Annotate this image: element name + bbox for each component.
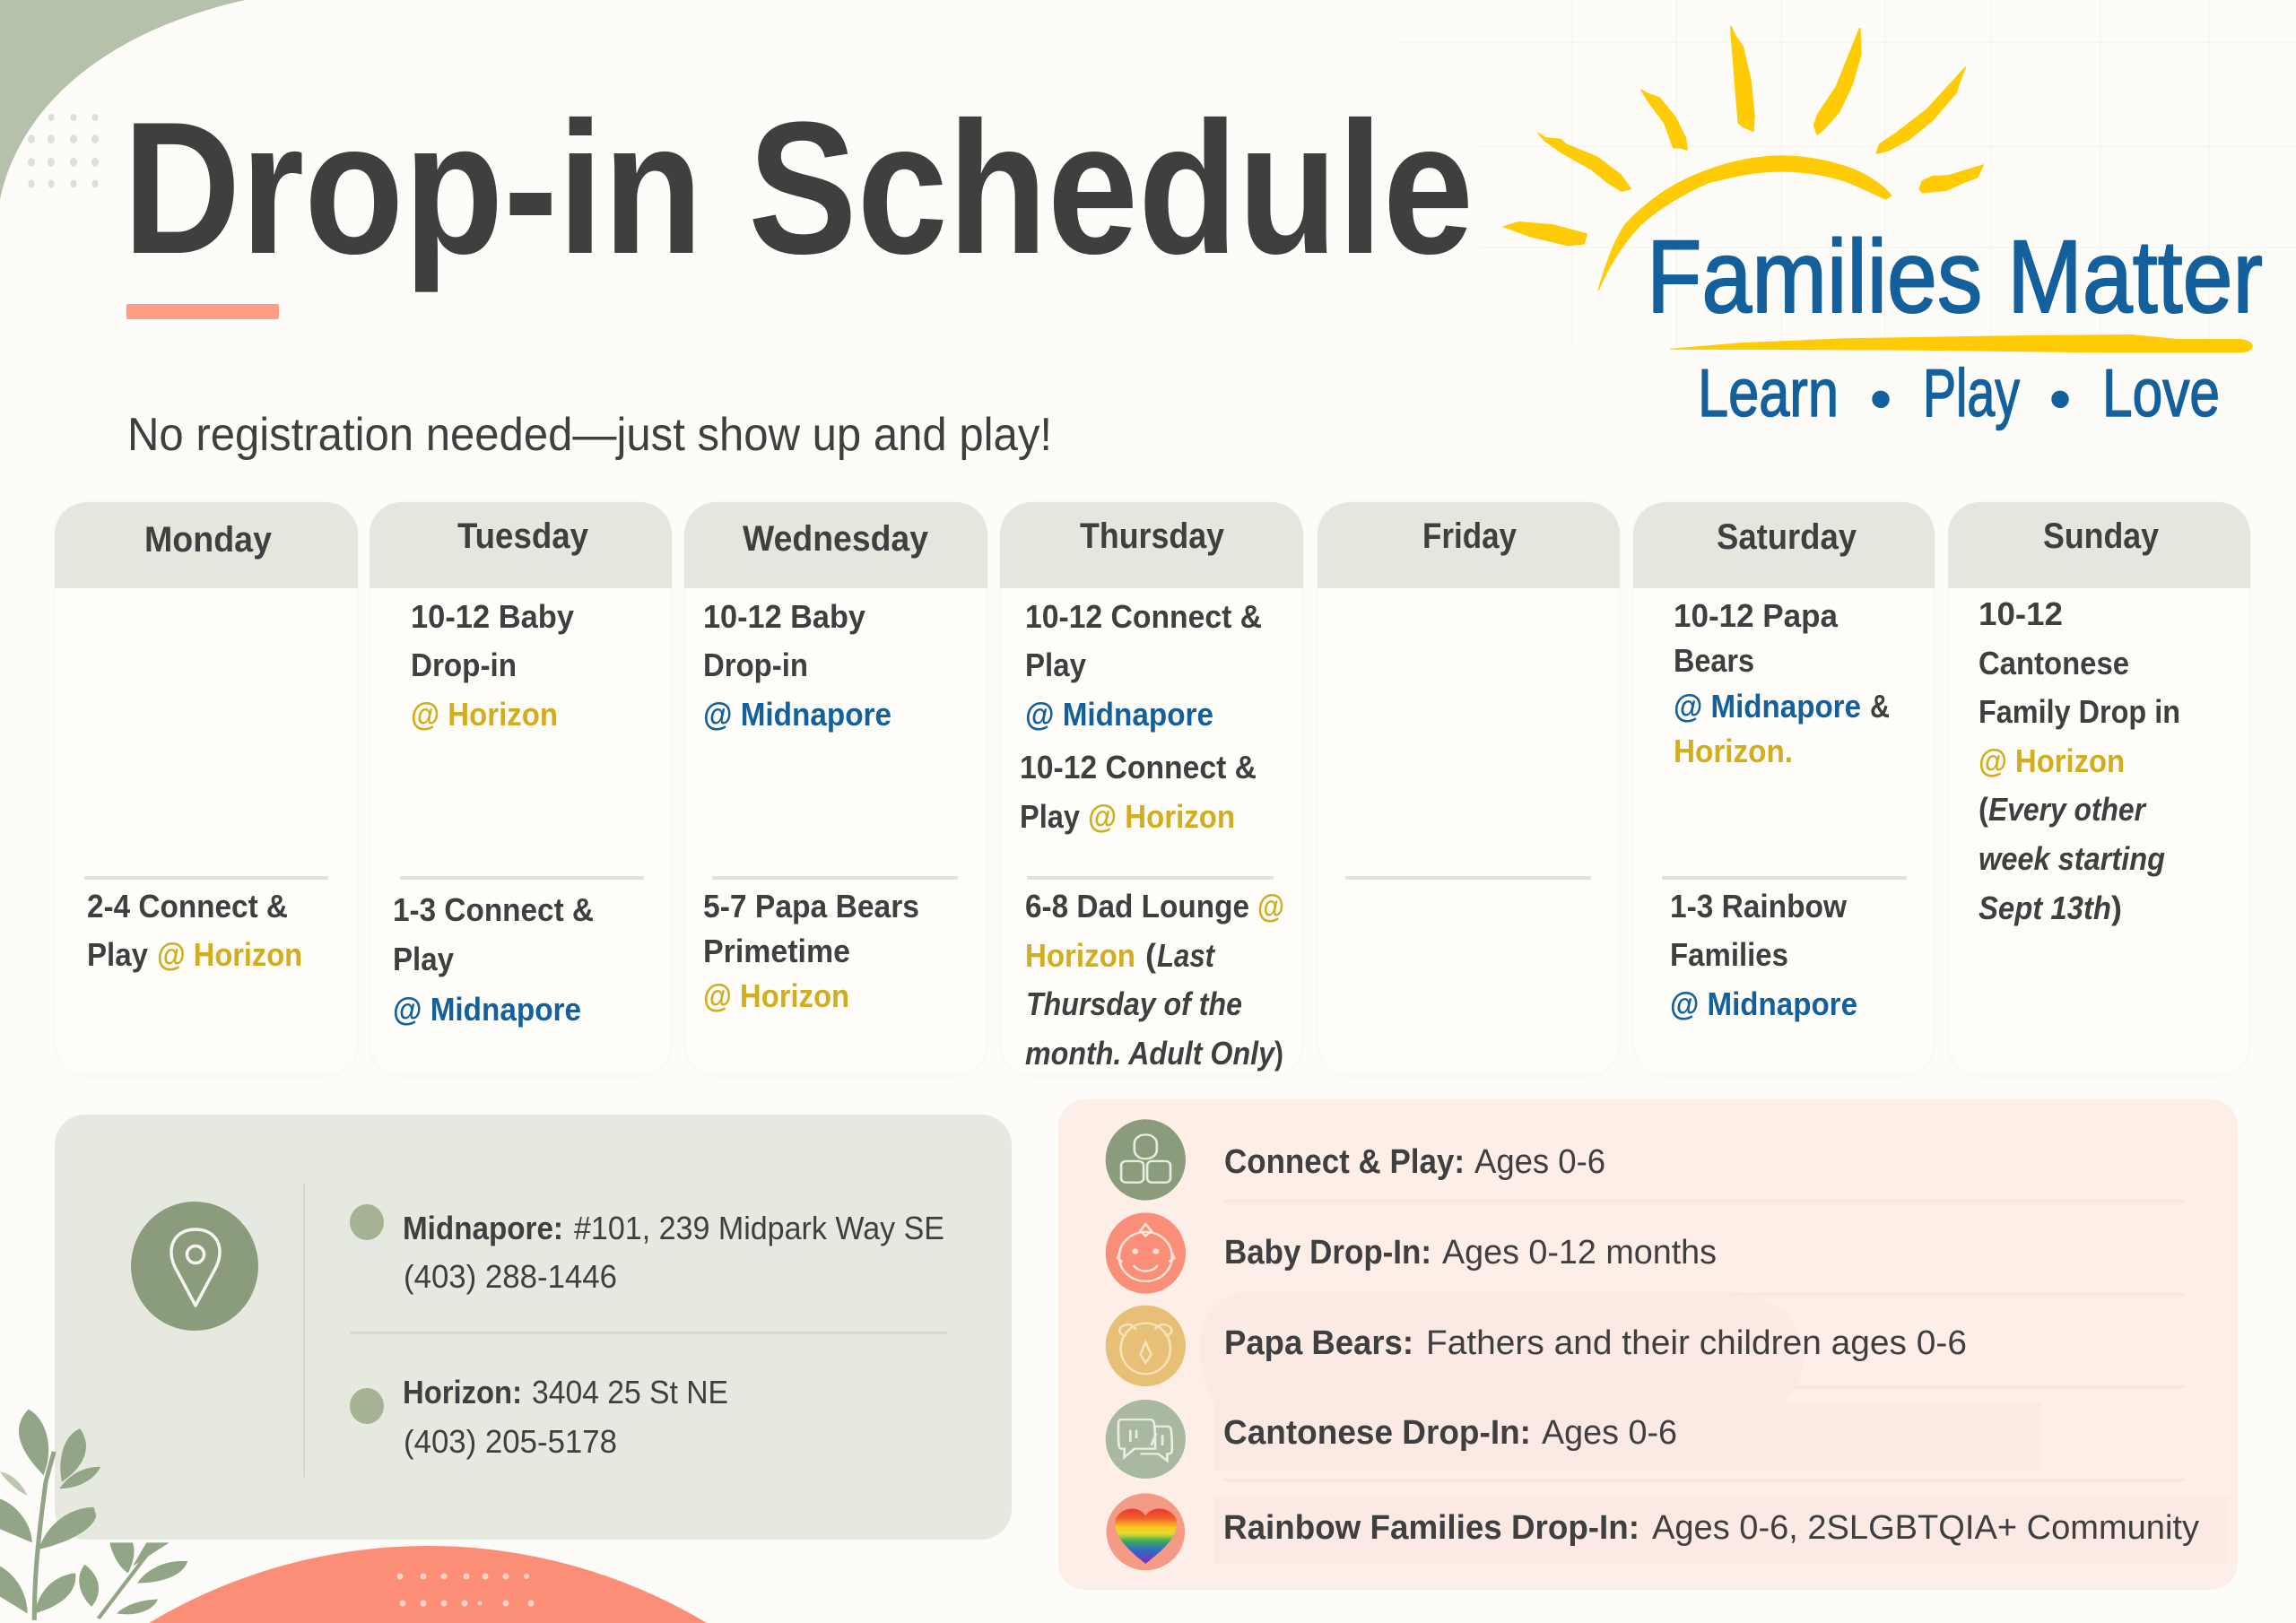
panel: Sunday bbox=[1948, 502, 2250, 1076]
morning session bbox=[703, 598, 891, 733]
panel: Tuesday bbox=[370, 502, 672, 1076]
legend item: Cantonese Drop-In: Ages 0-6 bbox=[1542, 1414, 1677, 1452]
heading: Sunday: Sunday bbox=[2043, 516, 2160, 556]
heading: Monday: Monday bbox=[144, 520, 273, 560]
afternoon session bbox=[1670, 888, 1857, 1022]
title underline accent bbox=[126, 304, 279, 319]
legend item: Rainbow Families Drop-In: Ages 0-6, 2SLGBTQIA+ Community bbox=[1652, 1509, 2199, 1547]
legend item: Rainbow Families Drop-In: Rainbow Families Drop-In: bbox=[1223, 1509, 1639, 1547]
location: Horizon: (403) 205-5178 bbox=[404, 1423, 617, 1460]
morning session: Horizon. bbox=[1674, 733, 1793, 769]
legend item: Rainbow Families Drop-In bbox=[1107, 1493, 2199, 1570]
legend item: Connect & Play: Connect & Play: bbox=[1224, 1143, 1465, 1181]
evening session: Primetime bbox=[703, 933, 850, 969]
evening session bbox=[703, 888, 919, 1014]
session: Cantonese: Sept 13th bbox=[1979, 890, 2111, 926]
session: Cantonese: Cantonese bbox=[1979, 645, 2129, 681]
heading: Wednesday: Wednesday bbox=[743, 519, 929, 559]
session: Cantonese bbox=[1979, 595, 2180, 926]
session: Cantonese: Family Drop in bbox=[1979, 693, 2180, 730]
decorative dot grid: top-left bbox=[28, 114, 99, 188]
morning session: Midnapore: Play bbox=[1025, 647, 1086, 683]
legend item: Connect & Play bbox=[1106, 1119, 1605, 1201]
afternoon session bbox=[87, 888, 302, 973]
legend item: Cantonese Drop-In: Cantonese Drop-In: bbox=[1223, 1414, 1531, 1452]
panel: Saturday bbox=[1633, 502, 1935, 1076]
evening session: Last bbox=[1157, 937, 1216, 974]
session: Cantonese: week starting bbox=[1979, 840, 2165, 877]
morning session: 10-12 Papa bbox=[1674, 597, 1839, 634]
location: Horizon: 3404 25 St NE bbox=[532, 1374, 728, 1410]
evening session: Horizon bbox=[1025, 937, 1135, 974]
logo tagline bbox=[1698, 355, 2220, 433]
evening session: ( bbox=[1145, 937, 1156, 974]
morning session: Midnapore: 10-12 Connect & bbox=[1025, 598, 1262, 635]
session: Cantonese: 10-12 bbox=[1979, 595, 2063, 632]
morning session: @ Horizon bbox=[411, 696, 558, 733]
icon: rainbow heart bbox=[1107, 1493, 1185, 1570]
logo tagline: • bbox=[2049, 365, 2071, 433]
evening session: 6-8 Dad Lounge bbox=[1025, 888, 1249, 924]
evening session: @ Horizon bbox=[703, 977, 849, 1014]
decorative dots: on coral bbox=[396, 1573, 535, 1607]
icon: location pin bbox=[131, 1202, 258, 1331]
morning session bbox=[1674, 597, 1890, 769]
morning session: Horizon: @ Horizon bbox=[1088, 798, 1235, 835]
panel: Monday bbox=[55, 502, 358, 1076]
session: Cantonese: Every other bbox=[1988, 791, 2147, 828]
session: Cantonese: ) bbox=[2111, 890, 2122, 926]
evening session: @ bbox=[1257, 888, 1284, 924]
subtitle: No registration needed—just show up and play! bbox=[127, 409, 1052, 461]
morning session: Horizon: 10-12 Connect & bbox=[1020, 749, 1257, 785]
afternoon session: Families bbox=[1670, 936, 1788, 973]
icon: bear face bbox=[1106, 1306, 1186, 1386]
heading: Tuesday: Tuesday bbox=[457, 516, 589, 556]
afternoon session: 2-4 Connect & bbox=[87, 888, 288, 924]
legend item: Connect & Play: Ages 0-6 bbox=[1474, 1143, 1605, 1181]
panel: Wednesday bbox=[684, 502, 987, 1076]
location: Midnapore: #101, 239 Midpark Way SE bbox=[574, 1210, 944, 1246]
evening session: ) bbox=[1274, 1035, 1283, 1072]
morning session: Horizon bbox=[1020, 749, 1257, 835]
location: Midnapore: (403) 288-1446 bbox=[404, 1258, 617, 1295]
morning session: @ Midnapore bbox=[1674, 688, 1861, 725]
session: Cantonese: ( bbox=[1979, 791, 1988, 828]
location: Midnapore: Midnapore: bbox=[403, 1210, 563, 1246]
legend item: Papa Bears: Papa Bears: bbox=[1224, 1324, 1413, 1362]
morning session: Midnapore bbox=[1025, 598, 1262, 733]
logo: Families Matter bbox=[1503, 26, 2263, 433]
evening session: Thursday of the bbox=[1026, 985, 1242, 1022]
heading: Friday: Friday bbox=[1422, 516, 1518, 556]
morning session: & bbox=[1870, 688, 1890, 725]
heading: Saturday: Saturday bbox=[1717, 517, 1857, 557]
logo tagline: Love bbox=[2102, 355, 2220, 430]
afternoon session: Play bbox=[393, 941, 454, 977]
morning session: Bears bbox=[1674, 642, 1754, 679]
morning session: Horizon: Play bbox=[1020, 798, 1080, 835]
location: Horizon: Horizon: bbox=[403, 1374, 522, 1410]
morning session: Midnapore: @ Midnapore bbox=[1025, 696, 1213, 733]
logo tagline: • bbox=[1870, 365, 1892, 433]
evening session: month. Adult Only bbox=[1025, 1035, 1276, 1072]
panel: legend bbox=[1058, 1099, 2238, 1590]
icon: sun with rays bbox=[1503, 26, 2252, 352]
morning session: 10-12 Baby bbox=[703, 598, 865, 635]
legend item: Baby Drop-In: Ages 0-12 months bbox=[1442, 1234, 1717, 1271]
morning session: 10-12 Baby bbox=[411, 598, 574, 635]
morning session: @ Midnapore bbox=[703, 696, 891, 733]
panel: Thursday bbox=[1000, 502, 1303, 1076]
icon: baby face bbox=[1106, 1212, 1186, 1294]
afternoon session: @ Horizon bbox=[157, 936, 302, 973]
afternoon session bbox=[393, 891, 594, 1028]
logo tagline: Learn bbox=[1698, 355, 1839, 430]
evening session: 5-7 Papa Bears bbox=[703, 888, 919, 924]
panel: Friday bbox=[1318, 502, 1620, 1076]
legend item: Baby Drop-In bbox=[1106, 1212, 1717, 1294]
icon: speech bubbles bbox=[1106, 1400, 1186, 1479]
legend item: Baby Drop-In: Baby Drop-In: bbox=[1224, 1234, 1431, 1271]
decorative blob: top-left green corner bbox=[0, 0, 245, 199]
panel: locations bbox=[55, 1115, 1012, 1540]
decorative semicircle: bottom coral bbox=[149, 1546, 707, 1623]
afternoon session: 1-3 Rainbow bbox=[1670, 888, 1848, 924]
legend item: Papa Bears: Fathers and their children ages 0-6 bbox=[1426, 1324, 1967, 1362]
morning session: Drop-in bbox=[411, 647, 517, 683]
morning session: Drop-in bbox=[703, 647, 808, 683]
afternoon session: @ Midnapore bbox=[1670, 985, 1857, 1022]
location: Horizon bbox=[350, 1374, 728, 1460]
legend item: Cantonese Drop-In bbox=[1106, 1400, 1677, 1479]
afternoon session: @ Midnapore bbox=[393, 991, 581, 1028]
afternoon session: Play bbox=[87, 936, 148, 973]
morning session bbox=[411, 598, 574, 733]
decorative plant: bottom-left leaves bbox=[0, 1410, 187, 1620]
location: Midnapore bbox=[350, 1204, 944, 1295]
title: Drop-in Schedule bbox=[123, 82, 1474, 293]
afternoon session: 1-3 Connect & bbox=[393, 891, 594, 928]
logo tagline: Play bbox=[1923, 355, 2020, 430]
heading: Thursday: Thursday bbox=[1080, 516, 1225, 556]
icon: blocks bbox=[1106, 1119, 1186, 1201]
evening session bbox=[1025, 888, 1284, 1072]
session: Cantonese: @ Horizon bbox=[1979, 742, 2125, 779]
legend item: Papa Bears bbox=[1106, 1306, 1967, 1386]
